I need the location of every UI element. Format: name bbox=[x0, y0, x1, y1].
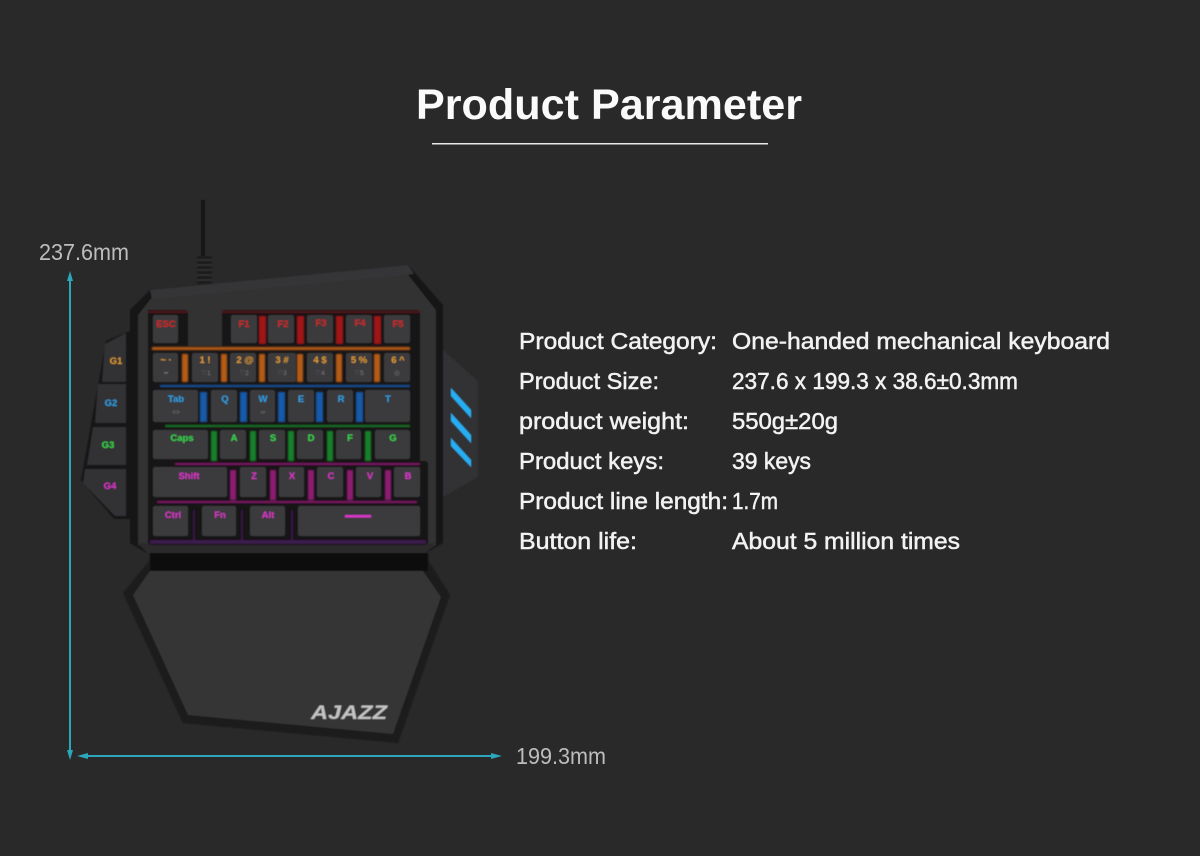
QWERT key row: T bbox=[385, 394, 391, 405]
function key row: F1 bbox=[238, 319, 250, 330]
ZXCVB key row: V bbox=[367, 471, 374, 482]
bottom key row bbox=[153, 506, 420, 536]
function key row: F5 bbox=[392, 319, 404, 330]
G1 key: G1 bbox=[110, 356, 123, 367]
key well bbox=[148, 310, 428, 545]
row: weight: product weight: bbox=[519, 408, 689, 434]
number key row: ▪▪ bbox=[164, 370, 168, 377]
ASDFG key row: F bbox=[347, 433, 353, 444]
magenta glow bbox=[157, 463, 420, 503]
blue glow bbox=[160, 385, 410, 422]
number key row: 2 @ bbox=[236, 355, 254, 366]
glow bars bbox=[148, 312, 426, 544]
AJAZZ logo: AJAZZ bbox=[310, 703, 389, 724]
keyboard illustration bbox=[81, 200, 478, 743]
bottom key row: Fn bbox=[214, 510, 226, 521]
number key row: ◎ bbox=[394, 370, 400, 377]
red glow bbox=[259, 316, 381, 344]
number key row: 5 % bbox=[351, 355, 368, 366]
ASDFG key row: S bbox=[270, 433, 276, 444]
function key row: ESC bbox=[156, 319, 176, 330]
ZXCVB key row: Z bbox=[251, 471, 257, 482]
row: button life: Button life: bbox=[519, 528, 637, 554]
number key row: 4 $ bbox=[313, 355, 327, 366]
row: weight: 550g±20g bbox=[732, 408, 838, 434]
ZXCVB key row bbox=[153, 467, 420, 497]
G2 key: G2 bbox=[105, 398, 117, 409]
row: category: Product Category: bbox=[519, 328, 717, 354]
QWERT key row: E bbox=[298, 394, 304, 405]
function key row bbox=[153, 315, 410, 343]
QWERT key row: <> bbox=[172, 409, 180, 416]
number key row: ♡5 bbox=[354, 369, 364, 377]
function key row: F3 bbox=[315, 318, 327, 329]
QWERT key row: ∞ bbox=[261, 409, 266, 416]
keyboard body bbox=[130, 265, 443, 553]
number key row: 6 ^ bbox=[391, 355, 405, 366]
row: size: 237.6 x 199.3 x 38.6±0.3mm bbox=[732, 368, 1018, 394]
ZXCVB key row: Shift bbox=[178, 471, 200, 482]
G3 key: G3 bbox=[102, 440, 114, 451]
height dimension label: 237.6mm bbox=[39, 239, 129, 265]
row: keys: Product keys: bbox=[519, 448, 664, 474]
row: button life bbox=[519, 528, 960, 554]
number key row bbox=[153, 353, 410, 382]
row: weight bbox=[519, 408, 838, 434]
title: Product Parameter bbox=[416, 81, 802, 129]
number key row: ♡3 bbox=[277, 369, 287, 377]
QWERT key row bbox=[153, 390, 410, 422]
ZXCVB key row: C bbox=[328, 471, 335, 482]
G1 key bbox=[102, 333, 126, 382]
G4 key bbox=[83, 469, 126, 516]
ASDFG key row: D bbox=[308, 433, 315, 444]
QWERT key row: Q bbox=[221, 394, 229, 405]
number key row: 3 # bbox=[275, 355, 289, 366]
QWERT key row: Tab bbox=[168, 394, 184, 405]
QWERT key row: W bbox=[259, 394, 268, 405]
row: button life: About 5 million times bbox=[732, 528, 960, 554]
title underline bbox=[432, 143, 768, 144]
width dimension label: 199.3mm bbox=[516, 743, 606, 769]
ASDFG key row: A bbox=[231, 433, 238, 444]
cable bbox=[197, 200, 212, 284]
row: line length: 1.7m bbox=[732, 488, 778, 514]
row: category bbox=[519, 328, 1110, 354]
purple glow bbox=[150, 510, 426, 544]
G2 key bbox=[95, 384, 126, 423]
row: size: Product Size: bbox=[519, 368, 659, 394]
row: keys: 39 keys bbox=[732, 448, 811, 474]
row: category: One-handed mechanical keyboard bbox=[732, 328, 1110, 354]
green glow bbox=[165, 425, 410, 461]
number key row: ♡2 bbox=[239, 369, 249, 377]
ASDFG key row bbox=[153, 430, 410, 459]
function key row: F4 bbox=[354, 318, 366, 329]
row: keys bbox=[519, 448, 811, 474]
right wing with blue stripes bbox=[441, 348, 478, 498]
ZXCVB key row: X bbox=[289, 471, 296, 482]
wrist rest bbox=[123, 553, 450, 743]
number key row: ♡4 bbox=[315, 369, 325, 377]
row: size bbox=[519, 368, 1018, 394]
function key row: F2 bbox=[277, 319, 289, 330]
number key row: ~ · bbox=[160, 355, 172, 366]
G3 key bbox=[87, 427, 126, 465]
G4 key: G4 bbox=[104, 481, 117, 492]
row: line length: Product line length: bbox=[519, 488, 728, 514]
width dimension arrow bbox=[77, 753, 502, 759]
number key row: 1 ! bbox=[199, 355, 211, 366]
orange glow bbox=[152, 347, 410, 382]
product parameter list bbox=[519, 328, 1110, 554]
ASDFG key row: G bbox=[389, 433, 397, 444]
bottom key row: Alt bbox=[262, 510, 275, 521]
bottom key row: Ctrl bbox=[165, 510, 181, 521]
number key row: ♡1 bbox=[201, 369, 211, 377]
left G-key wing bbox=[81, 331, 132, 519]
height dimension arrow bbox=[67, 271, 73, 760]
QWERT key row: R bbox=[338, 394, 345, 405]
ZXCVB key row: B bbox=[405, 471, 412, 482]
ASDFG key row: Caps bbox=[170, 433, 194, 444]
